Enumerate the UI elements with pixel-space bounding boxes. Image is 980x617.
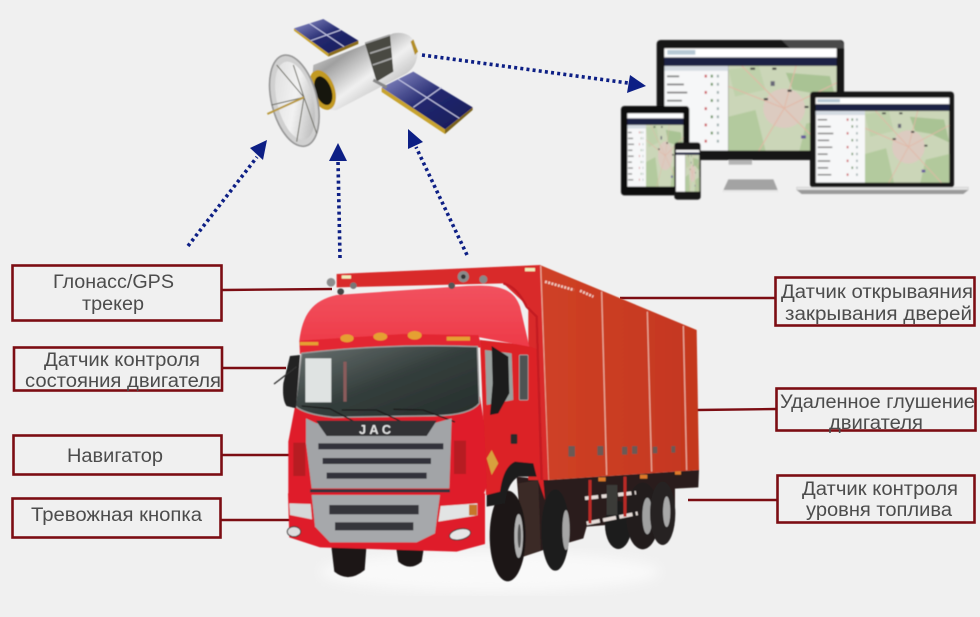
label: remote engine stop: Удаленное глушение <box>780 392 975 413</box>
desktop monitor <box>657 40 844 192</box>
label: engine state sensor: Датчик контроля <box>44 350 200 371</box>
dish <box>261 50 328 151</box>
label: navigator <box>14 436 222 474</box>
satellite body <box>312 33 417 110</box>
label: panic button: Тревожная кнопка <box>31 505 202 526</box>
door window and mirror <box>485 346 528 475</box>
underbody lights <box>598 471 681 481</box>
devices <box>621 40 968 200</box>
lower solar panel <box>382 72 473 134</box>
truck illustration <box>274 265 699 581</box>
brand name: JAC <box>359 423 394 437</box>
label: panic button <box>12 498 220 538</box>
roof antennas <box>327 271 487 295</box>
headlights <box>287 503 477 542</box>
label: door sensor: закрывания дверей <box>785 304 972 325</box>
phone <box>674 142 701 200</box>
sun visor band <box>299 334 482 354</box>
label: GLONASS/GPS tracker: Глонасс/GPS <box>53 272 174 293</box>
label: fuel level sensor: уровня топлива <box>806 500 952 521</box>
cargo box side <box>540 265 699 480</box>
label: GLONASS/GPS tracker <box>12 266 222 320</box>
front wheels <box>331 543 424 577</box>
cargo box latches <box>568 446 675 457</box>
wheel arch <box>487 462 537 507</box>
label: navigator: Навигатор <box>67 446 163 467</box>
arrow: truck to satellite right <box>408 129 467 255</box>
wipers <box>302 406 455 423</box>
label: engine state sensor: состояния двигателя <box>25 371 221 392</box>
cab side <box>480 340 545 500</box>
label: GLONASS/GPS tracker: трекер <box>82 294 144 315</box>
truck ground shadow <box>320 552 660 592</box>
label: remote engine stop <box>776 388 976 434</box>
left mirror <box>283 355 300 408</box>
label: door sensor: Датчик открываяния <box>781 282 973 303</box>
laptop <box>797 92 968 194</box>
label: engine state sensor <box>14 348 222 392</box>
arrow: truck to satellite left <box>188 140 267 246</box>
cab body <box>288 397 487 495</box>
side vents <box>293 441 466 476</box>
gold ring <box>304 66 341 114</box>
upper solar panel <box>294 19 358 57</box>
tablet <box>621 106 689 195</box>
dish feed <box>267 97 304 114</box>
arrow: satellite to devices <box>422 55 646 93</box>
cargo box front <box>337 265 548 480</box>
connector lines <box>221 289 777 520</box>
marker lights <box>300 331 470 345</box>
cargo box panel seams <box>541 266 687 480</box>
grille <box>306 418 452 488</box>
label: fuel level sensor <box>778 476 974 522</box>
label: door sensor <box>776 278 974 326</box>
arrow: truck to satellite middle <box>329 143 347 258</box>
chassis <box>517 470 699 557</box>
windshield <box>295 346 479 417</box>
rear wheels <box>605 482 675 549</box>
satellite <box>261 19 473 151</box>
grille slots <box>310 443 450 492</box>
middle wheels <box>490 480 570 581</box>
cab roof <box>299 286 529 347</box>
box logo marks <box>545 282 593 297</box>
side steps <box>585 477 638 523</box>
label: fuel level sensor: Датчик контроля <box>802 479 958 500</box>
label: remote engine stop: двигателя <box>829 413 923 434</box>
bumper <box>288 493 485 552</box>
